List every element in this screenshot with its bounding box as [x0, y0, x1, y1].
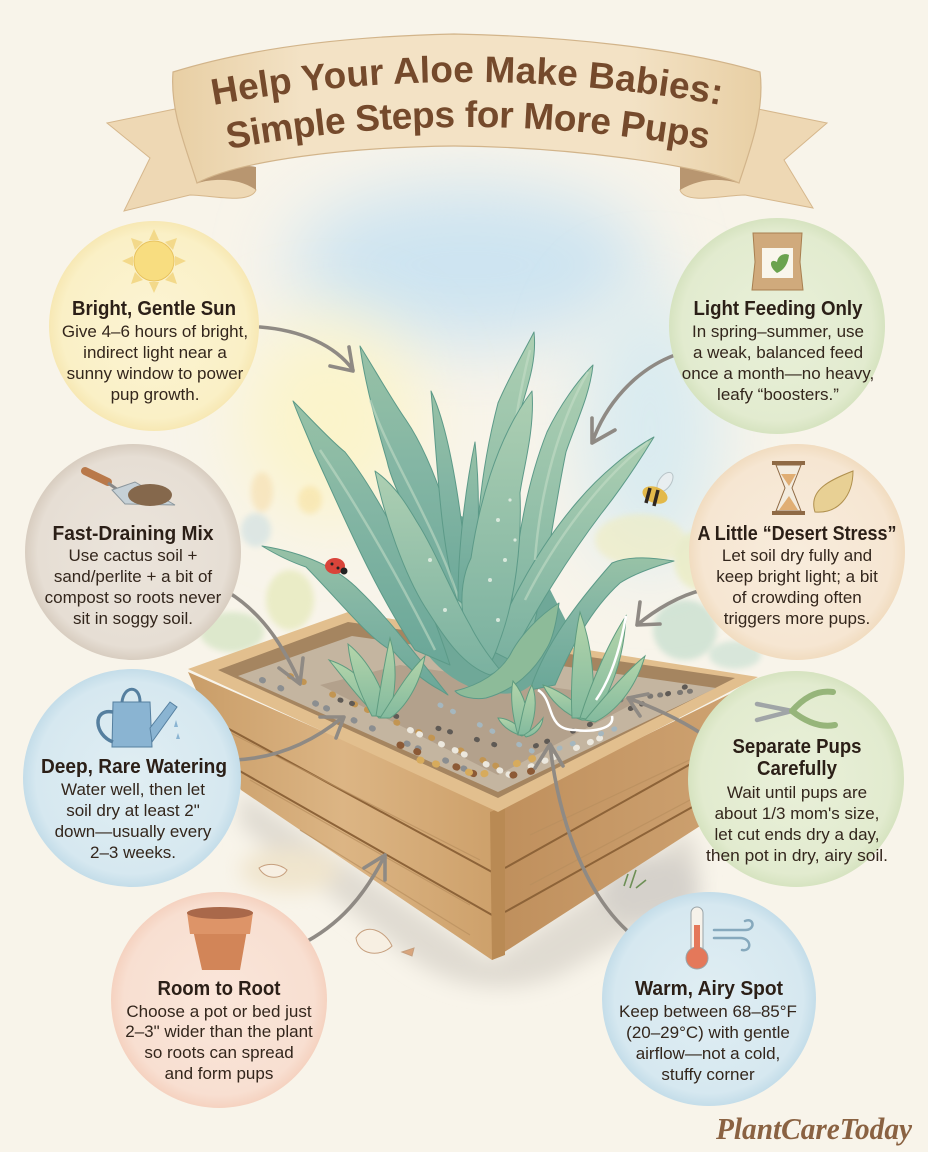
icon: trowel and soil — [85, 471, 175, 506]
arrow: soil to box — [228, 592, 303, 684]
leaf highlights — [320, 350, 648, 650]
body text: down—usually every — [55, 822, 212, 841]
body text: soil dry at least 2" — [66, 801, 200, 820]
panel: room to root — [111, 892, 327, 1108]
icon: thermometer and wind — [686, 907, 753, 969]
panel: light feeding only — [669, 218, 885, 434]
arrow: pot to box — [300, 855, 385, 945]
icon: fertilizer bag — [752, 233, 803, 290]
arrows — [228, 327, 708, 945]
body text: keep bright light; a bit — [716, 567, 878, 586]
body text: (20–29°C) with gentle — [626, 1023, 790, 1042]
logo: PlantCareToday — [715, 1111, 912, 1146]
ladybug — [325, 558, 348, 574]
body text: Wait until pups are — [727, 783, 867, 802]
body text: Let soil dry fully and — [722, 546, 872, 565]
bee — [640, 470, 676, 507]
body text: Choose a pot or bed just — [126, 1002, 312, 1021]
body text: of crowding often — [732, 588, 862, 607]
gravel pebbles — [262, 676, 700, 780]
heading: Light Feeding Only — [694, 297, 863, 320]
body text: sunny window to power — [67, 364, 244, 383]
leaf speckles — [428, 498, 517, 622]
body text: Use cactus soil + — [69, 546, 198, 565]
back leaves — [293, 332, 674, 690]
banner left tail — [107, 109, 256, 211]
white cut line — [538, 616, 626, 731]
body text: and form pups — [165, 1064, 273, 1083]
body text: Water well, then let — [61, 780, 205, 799]
body text: then pot in dry, airy soil. — [706, 846, 888, 865]
body text: sand/perlite + a bit of — [54, 567, 212, 586]
body text: pup growth. — [111, 385, 199, 404]
icon: sun — [122, 229, 186, 293]
body text: a weak, balanced feed — [693, 343, 863, 362]
ground wash — [240, 790, 700, 987]
arrow: sun to plant — [260, 327, 353, 371]
heading — [732, 735, 862, 780]
aloe plant — [262, 332, 674, 699]
banner — [106, 33, 828, 212]
panel: separate pups — [688, 671, 904, 887]
heading: Carefully — [757, 757, 838, 780]
body text: compost so roots never — [45, 588, 222, 607]
pup three — [543, 612, 645, 722]
body text: let cut ends dry a day, — [714, 825, 880, 844]
body text: so roots can spread — [144, 1043, 294, 1062]
body text: 2–3" wider than the plant — [125, 1022, 313, 1041]
panel: bright gentle sun — [49, 221, 259, 431]
watercolor sky wash — [240, 185, 720, 570]
body text: once a month—no heavy, — [682, 364, 874, 383]
eggshells — [259, 864, 414, 956]
left face — [188, 672, 498, 960]
grass tuft — [624, 870, 646, 888]
body text: sit in soggy soil. — [73, 609, 193, 628]
heading: Warm, Airy Spot — [635, 977, 783, 1000]
arrow: desert stress to pups — [637, 590, 703, 625]
heading: Separate Pups — [732, 735, 862, 758]
panel: warm airy spot — [602, 892, 816, 1106]
plank lines — [205, 716, 730, 915]
body text: Give 4–6 hours of bright, — [62, 322, 248, 341]
icon: hourglass and leaf — [772, 463, 853, 513]
heading: Room to Root — [158, 977, 281, 1000]
body text: In spring–summer, use — [692, 322, 864, 341]
body text: stuffy corner — [661, 1065, 755, 1084]
body text: 2–3 weeks. — [90, 843, 176, 862]
subtitle: Simple Steps for More Pups — [227, 100, 708, 151]
front leaves — [262, 391, 559, 699]
pup one — [329, 638, 425, 718]
body text: about 1/3 mom's size, — [715, 804, 879, 823]
front post — [490, 806, 505, 960]
pup two — [498, 681, 543, 737]
banner right tail — [680, 109, 827, 208]
soil — [238, 636, 716, 792]
body text: Keep between 68–85°F — [619, 1002, 797, 1021]
banner fold shading — [197, 166, 739, 190]
wooden planter box — [188, 612, 758, 960]
heading: Fast-Draining Mix — [52, 522, 214, 545]
icon: terracotta pot — [187, 907, 253, 970]
rim — [188, 612, 758, 812]
heading: A Little “Desert Stress” — [698, 522, 896, 545]
arrow: watering to pup — [235, 717, 344, 760]
icon: watering can — [98, 689, 180, 747]
panel: desert stress — [689, 444, 905, 660]
arrow: feeding to plant — [592, 355, 675, 443]
banner body — [173, 34, 761, 183]
body text: triggers more pups. — [724, 609, 870, 628]
right face — [492, 680, 758, 960]
plant core shadow — [405, 510, 568, 694]
body text: indirect light near a — [83, 343, 227, 362]
arrow: warm spot to pup — [535, 744, 632, 935]
heading: Bright, Gentle Sun — [72, 297, 236, 320]
heading: Deep, Rare Watering — [41, 755, 227, 778]
inner wall — [218, 622, 735, 798]
pups — [329, 612, 645, 737]
background garden foliage — [200, 472, 761, 669]
panel: fast-draining mix — [25, 444, 241, 660]
body text: leafy “boosters.” — [717, 385, 839, 404]
title: Help Your Aloe Make Babies: — [212, 56, 720, 105]
arrow: separate to pup — [628, 694, 708, 738]
body text: airflow—not a cold, — [636, 1044, 780, 1063]
panel: deep rare watering — [23, 669, 241, 887]
icon: pruners — [757, 692, 835, 726]
